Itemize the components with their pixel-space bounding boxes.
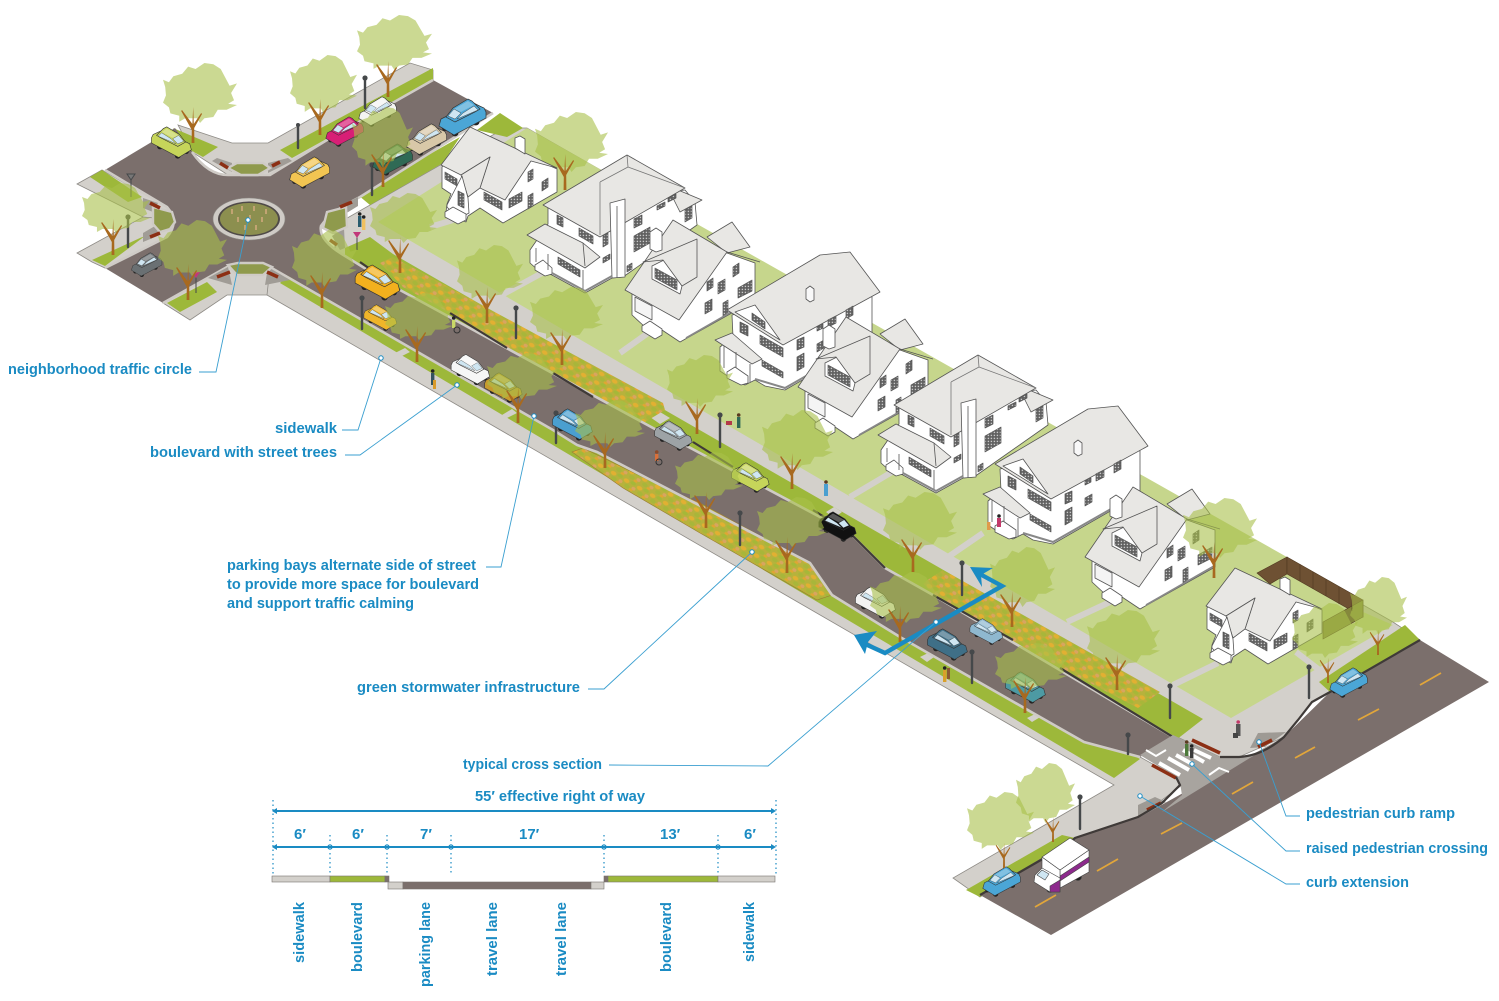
callout: parking bays: to provide more space for boulevard [227,576,479,593]
vertical labels: parking lane [417,902,434,987]
south boulevard strip [280,272,1140,778]
front lawns [378,128,1393,718]
northwest block sidewalk [178,63,433,175]
callout: pedestrian curb ramp [1257,740,1455,822]
delivery van [1034,838,1089,892]
curb bumps and ramps at intersection [143,158,358,285]
callout: green stormwater infrastructure [357,550,754,696]
house 6 foursquare [878,355,1053,493]
segment width labels: 6′ [294,826,306,843]
callout: boulevard with street trees: boulevard with street trees [150,444,337,461]
tree behind the houses [535,112,608,190]
right of way dimension line: 55′ effective right of way [475,788,646,805]
rain garden north, first block [380,257,665,422]
house 5 craftsman [798,317,933,439]
sidewalk and lawn block base behind the houses [335,128,1420,757]
section profile bars [272,876,775,889]
segment width labels: 17′ [519,826,540,843]
callout: typical cross section [463,620,938,773]
segment width labels: 13′ [660,826,681,843]
south sidewalk and corner [267,267,1182,897]
neighborhood traffic circle [213,198,285,240]
vertical labels: boulevard [349,902,366,972]
vertical labels [291,901,758,987]
callout: typical cross section: typical cross section [463,756,602,773]
callout: parking bays: and support traffic calming [227,595,414,612]
lawn walkways [430,220,1322,685]
west block sidewalks [77,170,177,268]
segment dimension line [272,844,776,850]
callout: neighborhood traffic circle [8,218,250,378]
vertical labels: travel lane [553,902,570,976]
street roadway and intersection [105,80,1173,757]
cross street lower right [980,640,1489,935]
street trees [82,15,1407,868]
callout: parking bays: parking bays alternate side of street [227,557,476,574]
vertical labels: travel lane [484,902,501,976]
callout: green stormwater infrastructure: green stormwater infrastructure [357,679,580,696]
rain garden north, second block [923,570,1160,708]
house 1 bungalow [441,127,557,224]
house 4 two-story [715,252,880,390]
callout: raised pedestrian crossing: raised pedestrian crossing [1306,840,1488,857]
south block sidewalk [163,267,280,320]
road center dashes [1035,673,1441,907]
raised crossing ramps [1152,740,1220,778]
cross-street boulevard, northeast [358,113,1420,692]
street lamps [125,75,1312,829]
callout: sidewalk [275,356,383,437]
callout: pedestrian curb ramp: pedestrian curb ramp [1306,805,1455,822]
southeast corner boulevard [966,835,1075,897]
west block boulevards [90,170,145,266]
callout: curb extension [1138,794,1409,891]
raised crossing gray pad [1140,735,1284,812]
dotted extension lines [273,800,776,875]
callout: parking bays [227,414,536,612]
northwest block boulevards [173,68,433,158]
wood fence [1257,557,1363,639]
callout: boulevard with street trees [150,383,459,461]
callout: sidewalk: sidewalk [275,420,338,437]
cross section diagram [272,788,776,987]
cross street dark curb [980,640,1420,895]
vertical labels: sidewalk [741,901,758,962]
crosswalk stripes [1159,750,1211,775]
right of way dimension line [272,788,776,814]
callout: neighborhood traffic circle: neighborhood traffic circle [8,361,192,378]
crossing chevrons [1146,750,1229,775]
vertical labels: sidewalk [291,901,308,963]
curb extensions [1138,732,1286,817]
house 9 bungalow [1206,568,1322,665]
segment width labels: 6′ [352,826,364,843]
house 7 two-story [983,406,1148,544]
house 3 craftsman [625,220,760,342]
vertical labels: boulevard [658,902,675,972]
segment width labels: 7′ [420,826,432,843]
south block boulevard [167,282,217,312]
rain garden south [572,448,832,600]
dark north curb segments [360,262,1173,737]
boulevard crossing walks [395,348,1042,722]
segment width labels [294,826,756,843]
segment width labels: 6′ [744,826,756,843]
cross section arrow marker [854,567,1002,654]
house 8 craftsman [1085,487,1220,609]
yield signs [127,174,361,293]
north boulevard strip [345,237,1203,740]
callout: raised pedestrian crossing [1190,762,1488,857]
parked and moving cars [131,97,1367,897]
pedestrians and cyclists [358,212,1240,758]
callout: curb extension: curb extension [1306,874,1409,891]
house 2 foursquare [527,155,702,293]
light curbs [105,80,1173,757]
